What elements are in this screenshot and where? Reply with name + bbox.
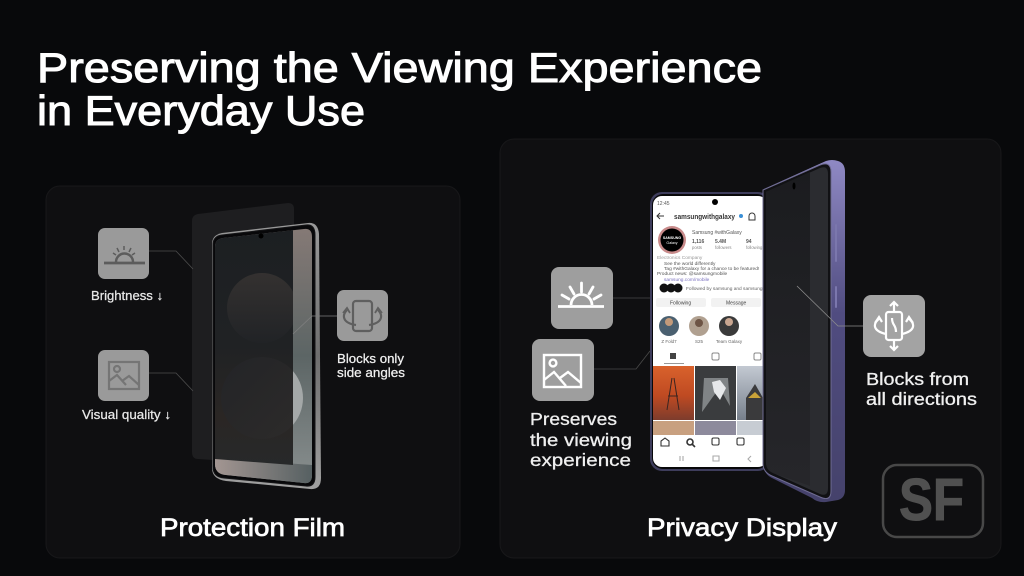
profile: posts [692, 245, 702, 250]
buttons: Following [670, 300, 691, 306]
app header [657, 199, 755, 221]
app header: 12:45 [657, 201, 670, 207]
app header: samsungwithgalaxy [674, 214, 735, 221]
profile: followers [715, 245, 732, 250]
panel: protection film [46, 186, 460, 558]
profile: 94 [746, 239, 752, 245]
watermark: SF logo [883, 465, 983, 537]
label: preserves the viewing experience: Preserves [530, 409, 617, 429]
profile: Electronics Company [657, 255, 703, 261]
story highlights: S25 [695, 339, 703, 344]
connector lines: privacy display [594, 298, 650, 369]
phone: back with app screen [650, 192, 770, 471]
icon: brightness [98, 228, 149, 279]
watermark: SF logo: SF [899, 467, 964, 533]
label: preserves the viewing experience: experience [530, 450, 631, 470]
profile: See the world differently [664, 261, 716, 267]
icon: picture [532, 339, 594, 401]
title: in Everyday Use [37, 87, 365, 134]
label: preserves the viewing experience: the viewing [530, 430, 632, 450]
profile: Tag #withGalaxy for a chance to be featured! [664, 266, 759, 272]
icon: sunrise [551, 267, 613, 329]
profile: 1,116 [692, 239, 704, 245]
connector lines: protection film [149, 251, 337, 391]
label: blocks from all directions [866, 369, 977, 409]
tabs [664, 353, 761, 364]
protective film sheet behind phone [192, 203, 294, 465]
label: blocks only side angles: Blocks only [337, 351, 405, 366]
label: blocks only side angles: side angles [337, 365, 406, 380]
profile: Samsung #withGalaxy [692, 230, 742, 236]
icon: blocks from all directions [863, 295, 925, 357]
label: preserves the viewing experience [530, 409, 632, 470]
profile: Followed by samsung and samsungus [686, 286, 768, 292]
profile: SAMSUNG [663, 236, 681, 240]
profile: Galaxy [666, 241, 678, 245]
story highlights: Team Galaxy [716, 339, 743, 344]
buttons: Message [726, 300, 747, 306]
profile: 5.4M [715, 239, 726, 245]
profile [657, 226, 768, 292]
photo grid [653, 366, 767, 435]
title: Preserving the Viewing Experience [37, 44, 762, 91]
title [37, 44, 762, 134]
label: blocks only side angles [337, 351, 406, 380]
heading: privacy display: Privacy Display [647, 514, 838, 542]
buttons [656, 298, 761, 307]
connector line: blocks from all directions [797, 286, 863, 326]
profile: following [746, 245, 763, 250]
story highlights [659, 316, 743, 344]
label: brightness: Brightness ↓ [91, 289, 163, 303]
nav bar icons [661, 438, 751, 462]
profile: samsung.com/mobile [664, 277, 710, 283]
label: visual quality: Visual quality ↓ [82, 408, 171, 422]
phone: front with privacy display [763, 160, 845, 502]
profile: Product news: @samsungmobile [657, 271, 728, 277]
label: blocks from all directions: all directions [866, 389, 977, 409]
story highlights: Z Fold7 [661, 339, 677, 344]
icon: blocks only side angles [337, 290, 388, 341]
heading: protection film: Protection Film [160, 514, 345, 542]
icon: visual quality [98, 350, 149, 401]
phone: protection film [212, 223, 321, 490]
label: blocks from all directions: Blocks from [866, 369, 969, 389]
panel: privacy display [500, 139, 1001, 558]
